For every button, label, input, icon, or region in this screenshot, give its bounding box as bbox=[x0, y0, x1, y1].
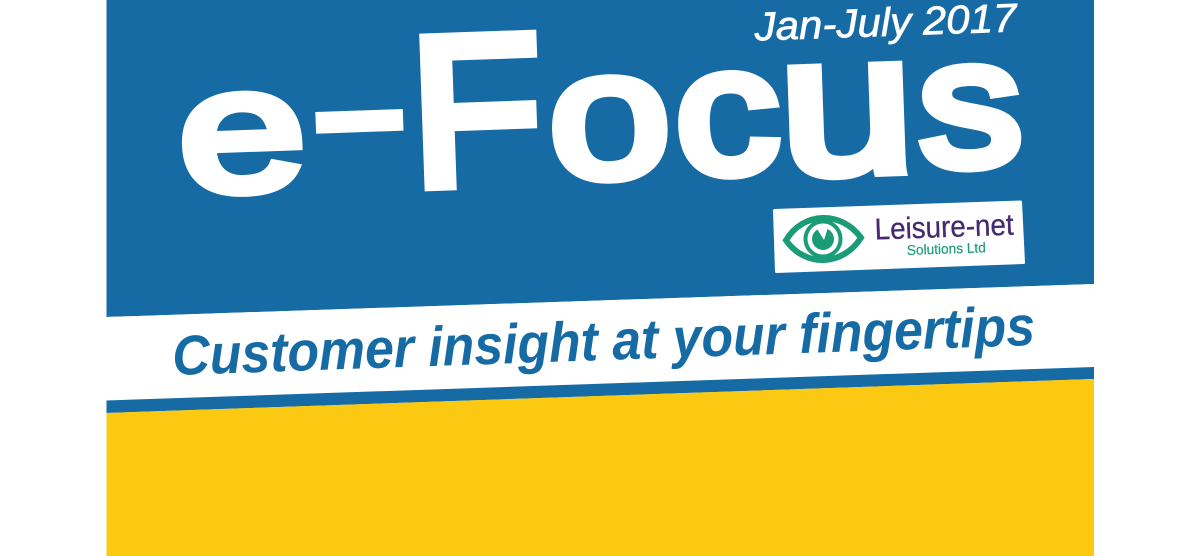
title: - bbox=[306, 11, 412, 205]
logo background bbox=[774, 202, 1024, 272]
panel: blue header bbox=[106, 0, 1094, 317]
title: s bbox=[915, 0, 1025, 205]
stripe: blue bbox=[106, 367, 1094, 413]
logo subtitle: Solutions Ltd bbox=[907, 239, 986, 258]
title bbox=[175, 0, 1025, 231]
tagline: Customer insight at your fingertips bbox=[171, 294, 1036, 387]
panel: white tagline band bbox=[106, 284, 1094, 400]
panel: yellow footer bbox=[106, 379, 1094, 556]
icon: eye bbox=[785, 217, 862, 261]
title: c bbox=[672, 8, 782, 212]
title: o bbox=[546, 13, 673, 217]
logo name: Leisure-net bbox=[874, 209, 1015, 246]
title: e bbox=[175, 30, 309, 230]
logo: Leisure-net Solutions Ltd bbox=[774, 202, 1024, 272]
